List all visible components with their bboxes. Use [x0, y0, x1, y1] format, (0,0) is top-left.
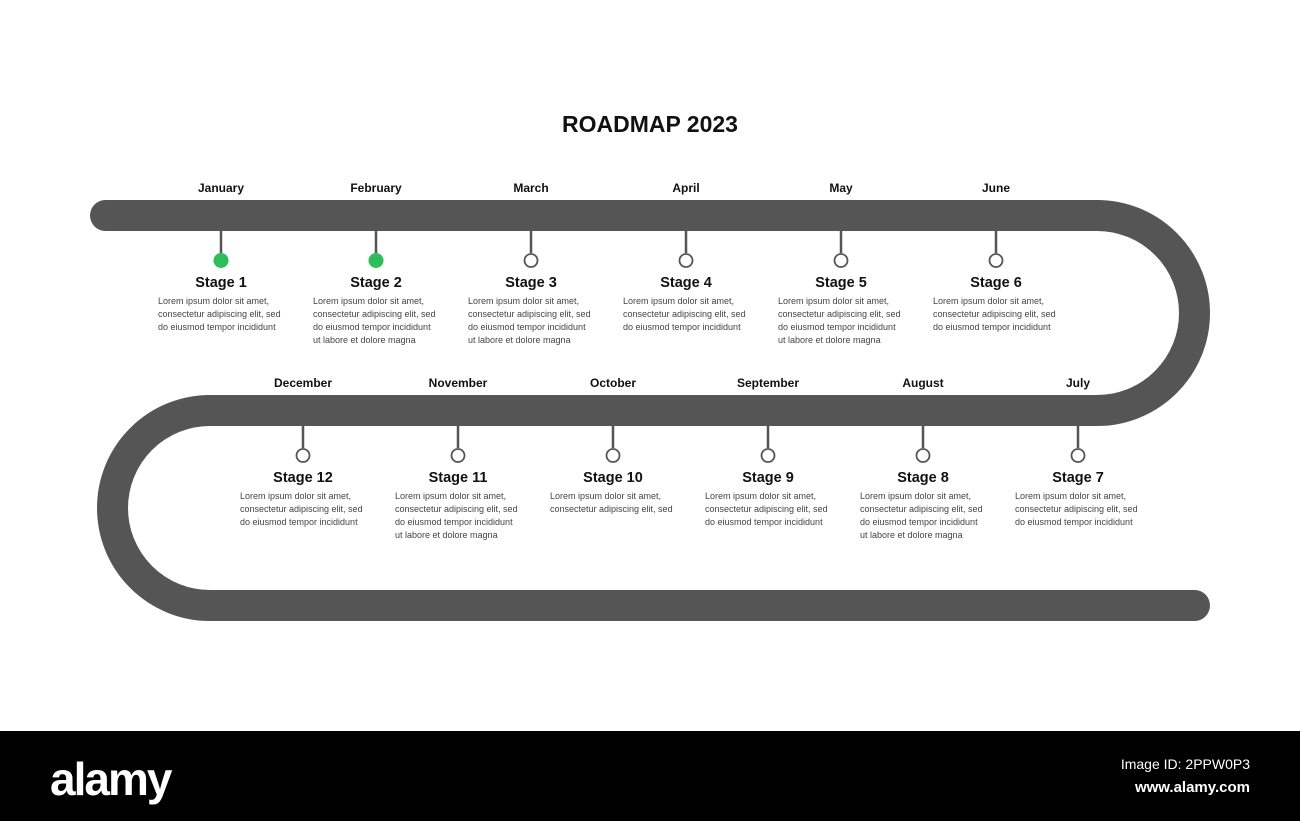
stage 11: consectetur adipiscing elit, sed	[395, 504, 518, 514]
stage 7	[1015, 376, 1138, 527]
stage 2: ut labore et dolore magna	[313, 335, 416, 345]
stage 7: consectetur adipiscing elit, sed	[1015, 504, 1138, 514]
road track	[106, 216, 1195, 606]
stage 12	[240, 376, 363, 527]
stage 10	[550, 376, 673, 514]
stage 4: do eiusmod tempor incididunt	[623, 322, 741, 332]
stage 8	[860, 376, 983, 540]
stage 7: Lorem ipsum dolor sit amet,	[1015, 491, 1126, 501]
footer band: alamy	[50, 753, 173, 805]
stage 9: Lorem ipsum dolor sit amet,	[705, 491, 816, 501]
stage 9: September	[737, 376, 799, 390]
stage 11	[395, 376, 518, 540]
stage 11: Lorem ipsum dolor sit amet,	[395, 491, 506, 501]
footer band: Image ID: 2PPW0P3	[1121, 756, 1250, 772]
stage 8: ut labore et dolore magna	[860, 530, 963, 540]
stage 12: Stage 12	[273, 470, 333, 486]
stage 6	[933, 181, 1056, 332]
stage 4: April	[672, 181, 700, 195]
stage 1: Lorem ipsum dolor sit amet,	[158, 296, 269, 306]
footer band: www.alamy.com	[1134, 779, 1250, 796]
stage 6: consectetur adipiscing elit, sed	[933, 309, 1056, 319]
stage 3: ut labore et dolore magna	[468, 335, 571, 345]
stage 9	[705, 376, 828, 527]
stage 5: do eiusmod tempor incididunt	[778, 322, 896, 332]
stage 3: Lorem ipsum dolor sit amet,	[468, 296, 579, 306]
stage 3	[468, 181, 591, 345]
stage 11: Stage 11	[429, 470, 487, 486]
stage 6: Lorem ipsum dolor sit amet,	[933, 296, 1044, 306]
stage 5: ut labore et dolore magna	[778, 335, 881, 345]
stage 2: Lorem ipsum dolor sit amet,	[313, 296, 424, 306]
stage 7: July	[1066, 376, 1090, 390]
stage 7: do eiusmod tempor incididunt	[1015, 517, 1133, 527]
stage 3: Stage 3	[505, 275, 557, 291]
stage 9: Stage 9	[742, 470, 794, 486]
stage 4	[623, 181, 746, 332]
title: ROADMAP 2023	[562, 111, 738, 137]
footer band	[0, 731, 1300, 821]
stage 10: Lorem ipsum dolor sit amet,	[550, 491, 661, 501]
stage 12: Lorem ipsum dolor sit amet,	[240, 491, 351, 501]
stage 8: Stage 8	[897, 470, 949, 486]
stage 5: Lorem ipsum dolor sit amet,	[778, 296, 889, 306]
stage 3: do eiusmod tempor incididunt	[468, 322, 586, 332]
stage 2: consectetur adipiscing elit, sed	[313, 309, 436, 319]
stage 1: do eiusmod tempor incididunt	[158, 322, 276, 332]
stage 2: February	[350, 181, 402, 195]
stage 8: August	[902, 376, 944, 390]
stage 6: do eiusmod tempor incididunt	[933, 322, 1051, 332]
stage 2	[313, 181, 436, 345]
stage 7: Stage 7	[1052, 470, 1104, 486]
stage 11: do eiusmod tempor incididunt	[395, 517, 513, 527]
stage 4: Lorem ipsum dolor sit amet,	[623, 296, 734, 306]
stage 8: do eiusmod tempor incididunt	[860, 517, 978, 527]
stage 12: consectetur adipiscing elit, sed	[240, 504, 363, 514]
stage 4: consectetur adipiscing elit, sed	[623, 309, 746, 319]
stage 2: do eiusmod tempor incididunt	[313, 322, 431, 332]
stage 6: Stage 6	[970, 275, 1022, 291]
stage 12: do eiusmod tempor incididunt	[240, 517, 358, 527]
stage 10: Stage 10	[583, 470, 643, 486]
stage 8: consectetur adipiscing elit, sed	[860, 504, 983, 514]
stage 12: December	[274, 376, 332, 390]
stage 4: Stage 4	[660, 275, 712, 291]
stage 1: Stage 1	[195, 275, 247, 291]
stage 1: January	[198, 181, 244, 195]
stage 5: consectetur adipiscing elit, sed	[778, 309, 901, 319]
stage 8: Lorem ipsum dolor sit amet,	[860, 491, 971, 501]
stage 2: Stage 2	[350, 275, 402, 291]
stage 10: October	[590, 376, 636, 390]
stage 11: ut labore et dolore magna	[395, 530, 498, 540]
stage 5	[778, 181, 901, 345]
stage 1	[158, 181, 281, 332]
stage 1: consectetur adipiscing elit, sed	[158, 309, 281, 319]
stage 11: November	[429, 376, 488, 390]
stage 6: June	[982, 181, 1010, 195]
stage 5: Stage 5	[815, 275, 867, 291]
stage 3: consectetur adipiscing elit, sed	[468, 309, 591, 319]
stage 5: May	[829, 181, 853, 195]
stage 9: consectetur adipiscing elit, sed	[705, 504, 828, 514]
stage 9: do eiusmod tempor incididunt	[705, 517, 823, 527]
stage 10: consectetur adipiscing elit, sed	[550, 504, 673, 514]
stage 3: March	[513, 181, 549, 195]
